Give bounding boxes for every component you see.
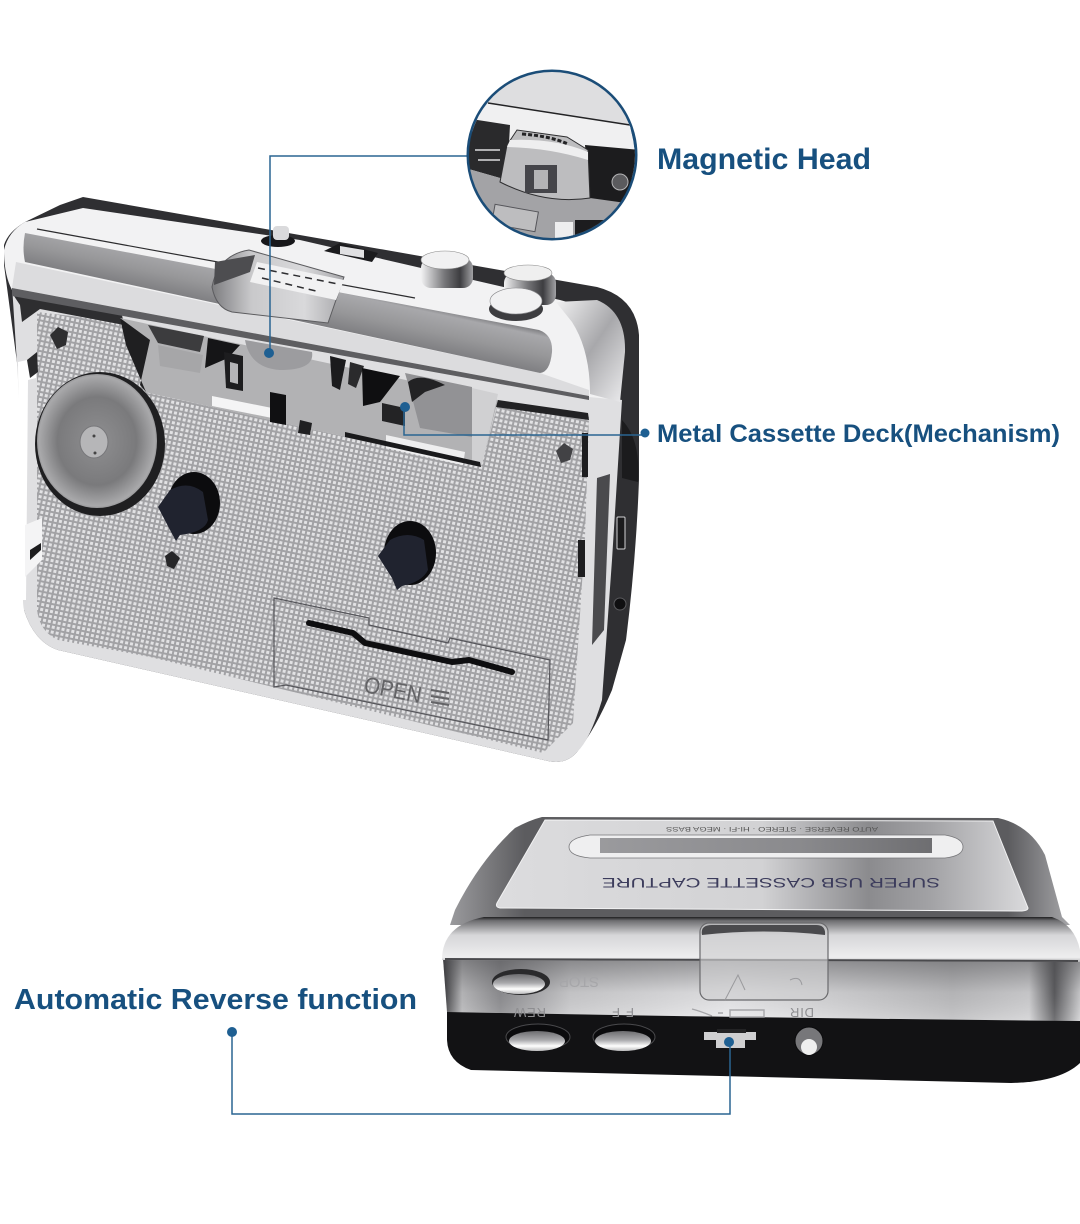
lower bar shadow bbox=[12, 288, 589, 400]
DIR label: DIR bbox=[790, 1005, 814, 1020]
FF label: FF bbox=[612, 1005, 634, 1020]
OPEN slider panel: OPEN bbox=[362, 671, 424, 708]
mode symbols bbox=[692, 1009, 764, 1017]
seam line bbox=[445, 959, 1078, 961]
slot of the direction switch bbox=[717, 1029, 746, 1033]
OPEN slider panel bbox=[274, 598, 550, 740]
small locator hole bbox=[165, 551, 180, 569]
black lower body bbox=[447, 1005, 1080, 1083]
STOP label: STOP bbox=[559, 973, 599, 990]
main cassette player, open view bbox=[4, 197, 639, 762]
stop button bbox=[492, 969, 550, 995]
chrome bar lower highlight bbox=[12, 262, 589, 396]
mechanism window bbox=[120, 318, 589, 467]
bar edge line bbox=[37, 229, 415, 298]
latch bbox=[700, 923, 828, 1000]
closed cassette player, front view bbox=[442, 817, 1080, 1083]
audio jack bbox=[614, 598, 626, 610]
left edge clips bbox=[18, 352, 42, 600]
side bevel bbox=[450, 817, 1070, 925]
chrome lower shading bbox=[443, 958, 1080, 1021]
direction switch bbox=[704, 1030, 756, 1048]
dir toggle bbox=[795, 1027, 823, 1055]
side port strip bbox=[592, 474, 610, 645]
dark strip beneath the bar at left bbox=[12, 293, 124, 325]
upside-down product text: SUPER USB CASSETTE CAPTURE bbox=[602, 875, 940, 890]
display window bbox=[569, 835, 963, 858]
chrome upper band bbox=[442, 917, 1080, 962]
label: Metal Cassette Deck: Metal Cassette Deck(Mechanism) bbox=[657, 420, 1060, 448]
hold switch bbox=[324, 243, 378, 262]
knurled cassette door bbox=[37, 312, 589, 753]
latch bbox=[212, 250, 344, 323]
chrome bar band bbox=[24, 233, 552, 373]
left drive spindle bbox=[158, 472, 220, 541]
callout line: automatic reverse bbox=[227, 1027, 734, 1114]
usb port bbox=[617, 517, 625, 549]
ff button bbox=[593, 1024, 655, 1051]
upside-down small specification text: AUTO REVERSE · STEREO · HI-FI · MEGA BASS bbox=[665, 825, 878, 832]
transport buttons bbox=[421, 251, 556, 321]
callout line: cassette deck bbox=[400, 402, 650, 438]
top surface bbox=[4, 208, 620, 400]
volume wheel bbox=[622, 420, 638, 482]
rew button bbox=[506, 1024, 570, 1051]
label: Automatic Reverse function: Automatic Reverse function bbox=[14, 984, 417, 1016]
callout line: magnetic head bbox=[264, 156, 500, 358]
top plate bbox=[496, 820, 1028, 911]
REW label: REW bbox=[513, 1005, 546, 1020]
power switch bbox=[261, 226, 295, 247]
magnetic head zoom circle bbox=[465, 68, 640, 245]
tape spool window bbox=[35, 372, 165, 516]
label: Magnetic Head: Magnetic Head bbox=[657, 143, 871, 176]
right corner of the bar bbox=[556, 300, 625, 402]
dark shell bbox=[4, 197, 639, 762]
front frame bbox=[12, 285, 622, 762]
locator holes bbox=[50, 327, 588, 577]
LCD strip bbox=[600, 838, 932, 853]
right drive spindle bbox=[378, 521, 436, 590]
chrome lower band bbox=[443, 958, 1080, 1021]
